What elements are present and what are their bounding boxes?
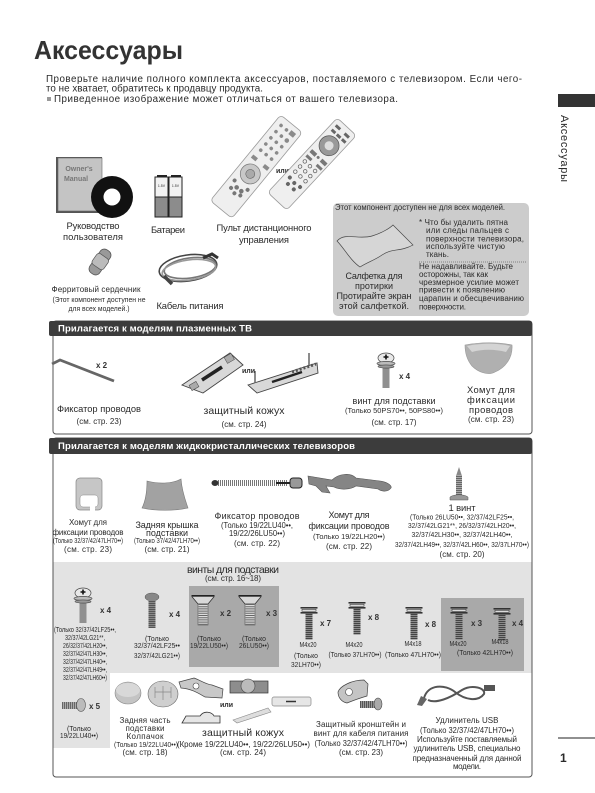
item: screw A: 32/37/42/47LH49••, — [63, 667, 107, 674]
item: protective cover — [182, 353, 318, 429]
item: horizontal screw: 19/22LU40••) — [60, 733, 98, 740]
panel: cleaning cloth note — [333, 203, 529, 316]
item: screw F: M4x20 — [346, 642, 363, 649]
item: screw C — [190, 595, 232, 650]
caption: cloth: Протирайте экран — [336, 291, 412, 301]
item: screw F: (Только 37LH70••) — [328, 652, 382, 659]
item: cable tie — [212, 478, 302, 548]
item: protective bracket: Защитный кронштейн и — [316, 720, 406, 729]
icon: batteries — [155, 175, 182, 217]
item: stand back and cap: (см. стр. 18) — [122, 748, 168, 757]
panel: LCD TV accessories — [49, 438, 532, 777]
note: remove stains: * Что бы удалить пятна — [419, 218, 509, 227]
item: protective cover LCD: (см. стр. 24) — [220, 748, 266, 757]
item: cable clamp: фиксации — [467, 394, 515, 405]
item: screw E: (Только — [294, 653, 318, 660]
note: do not press — [419, 262, 524, 312]
icon: power cable — [157, 251, 219, 285]
item: screw G: M4x18 — [404, 641, 422, 648]
caption: manual: Руководство — [66, 220, 120, 231]
item: screw A: 32/37/42/47LH40••, — [63, 659, 107, 666]
item: horizontal screw: (Только — [67, 726, 91, 733]
item: cable clamp long: (см. стр. 22) — [326, 542, 372, 551]
item: protective cover: защитный кожух — [204, 405, 285, 417]
panel: plasma TV accessories — [49, 321, 532, 434]
note: remove stains: поверхности телевизора, — [426, 234, 524, 244]
caption: ferrite core: (Этот компонент доступен не — [52, 297, 146, 304]
item: clamp — [52, 478, 124, 554]
item: screw E: 32LH70••) — [291, 662, 321, 669]
item: single screw: 32/37/42LG21**, 26/32/37/42LH20••, — [408, 523, 516, 530]
icon: remote control 2 — [268, 118, 356, 210]
item: screw A: 32/37/42/47LH60••) — [63, 675, 107, 682]
item: cable clamp: Хомут для — [467, 384, 515, 395]
item: screw E: M4x20 — [300, 642, 317, 649]
item: USB extension: предназначенный для данной — [412, 754, 522, 763]
item: screw D: x 3 — [266, 609, 278, 618]
item: screw G: (Только 47LH70••) — [385, 652, 441, 659]
item: cable holder — [52, 360, 141, 426]
caption: ferrite core — [52, 285, 146, 313]
item: clamp: (Только 32/37/42/47LH70••) — [53, 538, 123, 545]
item: screw C: 19/22LU50••) — [190, 643, 228, 650]
note: do not press: осторожны, так как — [419, 270, 488, 279]
item: USB extension: Используйте поставляемый — [417, 735, 517, 744]
page number: 1 — [560, 751, 567, 765]
item: stand screw: (см. стр. 17) — [372, 418, 417, 427]
item: screw C: x 2 — [220, 609, 232, 618]
item: USB extension: Удлинитель USB — [436, 716, 498, 725]
item: cable holder: x 2 — [96, 361, 108, 370]
item: screw H: x 3 — [471, 619, 483, 628]
item: screw A: 32/37/42/47LH30••, — [63, 651, 107, 658]
intro text: то не хватает, обратитесь к продавцу продукта. — [46, 84, 263, 94]
panel: cleaning cloth note: Этот компонент доступен не для всех моделей. — [335, 203, 505, 212]
item: USB extension: удлинитель USB, специально — [414, 744, 521, 753]
icon: owner's manual and CD: Owner's — [65, 166, 93, 173]
item: protective cover LCD: (Кроме 19/22LU40••, 19/22/26LU50••) — [177, 740, 310, 749]
caption: cloth: Салфетка для — [346, 271, 403, 281]
item: screw G: x 8 — [425, 620, 437, 629]
item: horizontal screw — [60, 698, 101, 740]
icon: owner's manual and CD: Manual — [64, 176, 88, 183]
item: screw G — [385, 607, 441, 659]
item: screw E: x 7 — [320, 619, 332, 628]
icon: cloth — [337, 225, 413, 267]
item: stand back cover: (Только 37/42/47LH70••) — [134, 538, 200, 545]
item: horizontal screw: x 5 — [89, 702, 101, 711]
item: cable clamp — [465, 343, 515, 424]
item: stand back and cap: Задняя часть — [120, 716, 170, 725]
heading: stand screws — [187, 564, 279, 583]
icon: ferrite core — [86, 247, 114, 277]
item: screw C: (Только — [197, 636, 221, 643]
item: screw F: x 8 — [368, 613, 380, 622]
item: cable clamp long — [308, 474, 391, 551]
side tab — [558, 94, 595, 182]
item: protective cover LCD — [177, 678, 311, 757]
item: single screw: 32/37/42LH30••, 32/37/42LH40••, — [412, 532, 513, 539]
caption: remote control: Пульт дистанционного — [216, 222, 312, 233]
item: screw B — [134, 593, 181, 660]
heading: LCD: Прилагается к моделям жидкокристаллических телевизоров — [58, 441, 355, 452]
item: protective bracket: (см. стр. 23) — [339, 748, 383, 757]
box: flat-head screws — [189, 586, 279, 667]
caption: manual: пользователя — [63, 231, 123, 242]
icon: remote control 1 — [210, 115, 302, 218]
item: screw H — [450, 607, 483, 648]
title: Аксессуары — [34, 35, 183, 65]
item: protective cover: (см. стр. 24) — [222, 420, 267, 429]
intro text: Проверьте наличие полного комплекта аксессуаров, поставляемого с телевизором. Если чего- — [46, 74, 522, 85]
item: stand back and cap: Колпачок — [126, 732, 164, 741]
item: stand back cover: подставки — [146, 528, 188, 538]
icon: owner's manual and CD — [56, 157, 133, 218]
item: single screw: (Только 26LU50••, 32/37/42LF25••, — [410, 514, 514, 522]
item: cable clamp: (см. стр. 23) — [468, 415, 514, 424]
item: screw D: 26LU50••) — [239, 643, 269, 650]
item: single screw: 32/37/42LH49••, 32/37/42LH60••, 32/37LH70••) — [395, 542, 529, 549]
item: stand back and cap: подставки — [126, 724, 164, 733]
item: screw H: M4x20 — [450, 641, 467, 648]
item: cable clamp long: (Только 19/22LH20••) — [313, 534, 385, 541]
icon: batteries: 1.5V — [172, 184, 180, 188]
side tab: Аксессуары — [558, 115, 570, 182]
item: screw I: x 4 — [512, 619, 524, 628]
item: single screw: (см. стр. 20) — [440, 550, 485, 559]
caption: 42LH70: (Только 42LH70••) — [457, 650, 513, 657]
heading: plasma — [49, 321, 532, 336]
item: stand back cover: (см. стр. 21) — [144, 545, 190, 554]
item: stand back and cap — [114, 681, 178, 757]
item: screw B: x 4 — [169, 610, 181, 619]
item: protective cover LCD: или — [220, 702, 233, 709]
caption: cloth — [336, 271, 412, 311]
backdrop: grey screws band — [54, 562, 532, 748]
item: screw F — [328, 602, 382, 659]
item: screw D: (Только — [242, 636, 266, 643]
icon: batteries: 1.5V — [158, 184, 166, 188]
item: screw A: x 4 — [100, 606, 112, 615]
caption: manual — [63, 220, 123, 242]
item: screw I: M4x18 — [492, 639, 509, 646]
item: screw B: 32/37/42LF25•• — [134, 643, 181, 650]
intro text: Приведенное изображение может отличаться от вашего телевизора. — [54, 94, 398, 105]
heading: plasma: Прилагается к моделям плазменных ТВ — [58, 324, 252, 334]
item: single screw — [395, 467, 529, 559]
item: screw B: 32/37/42LG21••) — [134, 653, 180, 660]
note: do not press: привести к появлению — [419, 286, 505, 294]
caption: cloth: протирки — [355, 281, 393, 291]
item: cable holder: (см. стр. 23) — [76, 417, 122, 426]
item: cable clamp long: Хомут для — [328, 510, 370, 520]
item: stand back and cap: (Только 19/22LU40••) — [114, 742, 178, 749]
heading: LCD — [49, 438, 532, 454]
item: clamp: (см. стр. 23) — [64, 545, 112, 554]
heading: stand screws: (см. стр. 16~18) — [205, 574, 261, 583]
item: screw D — [238, 595, 278, 650]
note: do not press: поверхности. — [419, 302, 466, 312]
page number — [558, 738, 595, 765]
item: single screw: 1 винт — [448, 502, 476, 513]
item: protective bracket: (Только 32/37/42/47LH70••) — [314, 739, 408, 748]
item: cable clamp: проводов — [469, 404, 513, 415]
item: screw A: 32/37/42LG21**, — [65, 635, 105, 642]
item: screw A: (Только 32/37/42LF25••, — [54, 627, 116, 634]
item: cable tie: (см. стр. 22) — [234, 539, 280, 548]
item: cable tie: (Только 19/22LU40••, — [221, 521, 293, 530]
item: protective cover LCD: защитный кожух — [202, 727, 285, 739]
item: screw A — [54, 588, 116, 682]
note: do not press: чрезмерное усилие может — [419, 278, 519, 287]
note: do not press: Не надавливайте. Будьте — [419, 262, 514, 271]
item: screw B: (Только — [145, 636, 169, 643]
item: cable tie: 19/22/26LU50••) — [229, 529, 285, 538]
item: stand screw: (Только 50PS70••, 50PS80••) — [345, 408, 443, 415]
item: protective cover: или — [242, 368, 255, 375]
note: do not press: царапин и обесцвечиванию — [419, 294, 524, 303]
caption: batteries: Батареи — [151, 224, 185, 235]
caption: remote control: управления — [239, 234, 289, 245]
heading: stand screws: винты для подставки — [187, 564, 279, 576]
caption: power cable: Кабель питания — [156, 300, 224, 311]
item: USB extension: модели. — [453, 762, 481, 771]
note: remove stains: ткань. — [426, 250, 449, 259]
item: stand back cover — [134, 479, 200, 554]
intro text — [46, 74, 522, 105]
caption: remote control — [216, 222, 312, 245]
note: remove stains: используйте чистую — [426, 242, 505, 251]
item: protective bracket — [314, 680, 408, 757]
item: USB extension: (Только 32/37/42/47LH70••) — [420, 726, 514, 735]
caption: ferrite core: Ферритовый сердечник — [52, 285, 141, 294]
item: screw A: 26/32/37/42LH20••, — [63, 643, 107, 650]
item: stand screw: винт для подставки — [352, 396, 436, 406]
item: clamp: Хомут для — [69, 518, 107, 527]
item: cable clamp long: фиксации проводов — [308, 521, 390, 531]
item: protective bracket: винт для кабеля питания — [314, 729, 408, 738]
caption: cloth: этой салфеткой. — [339, 301, 409, 311]
note: remove stains — [419, 218, 524, 259]
label: или: или — [276, 168, 289, 175]
item: cable tie: Фиксатор проводов — [214, 511, 300, 521]
item: cable holder: Фиксатор проводов — [57, 404, 141, 414]
item: screw I — [492, 608, 524, 646]
item: stand screw: x 4 — [399, 372, 411, 381]
note: remove stains: или следы пальцев с — [426, 226, 509, 235]
item: screw E — [291, 607, 332, 669]
item: stand back cover: Задняя крышка — [136, 520, 198, 530]
box: 42LH70 screws — [441, 598, 524, 671]
item: clamp: фиксации проводов — [52, 528, 124, 537]
item: USB extension — [412, 685, 522, 771]
caption: ferrite core: для всех моделей.) — [68, 305, 130, 313]
item: stand screw — [345, 353, 443, 427]
